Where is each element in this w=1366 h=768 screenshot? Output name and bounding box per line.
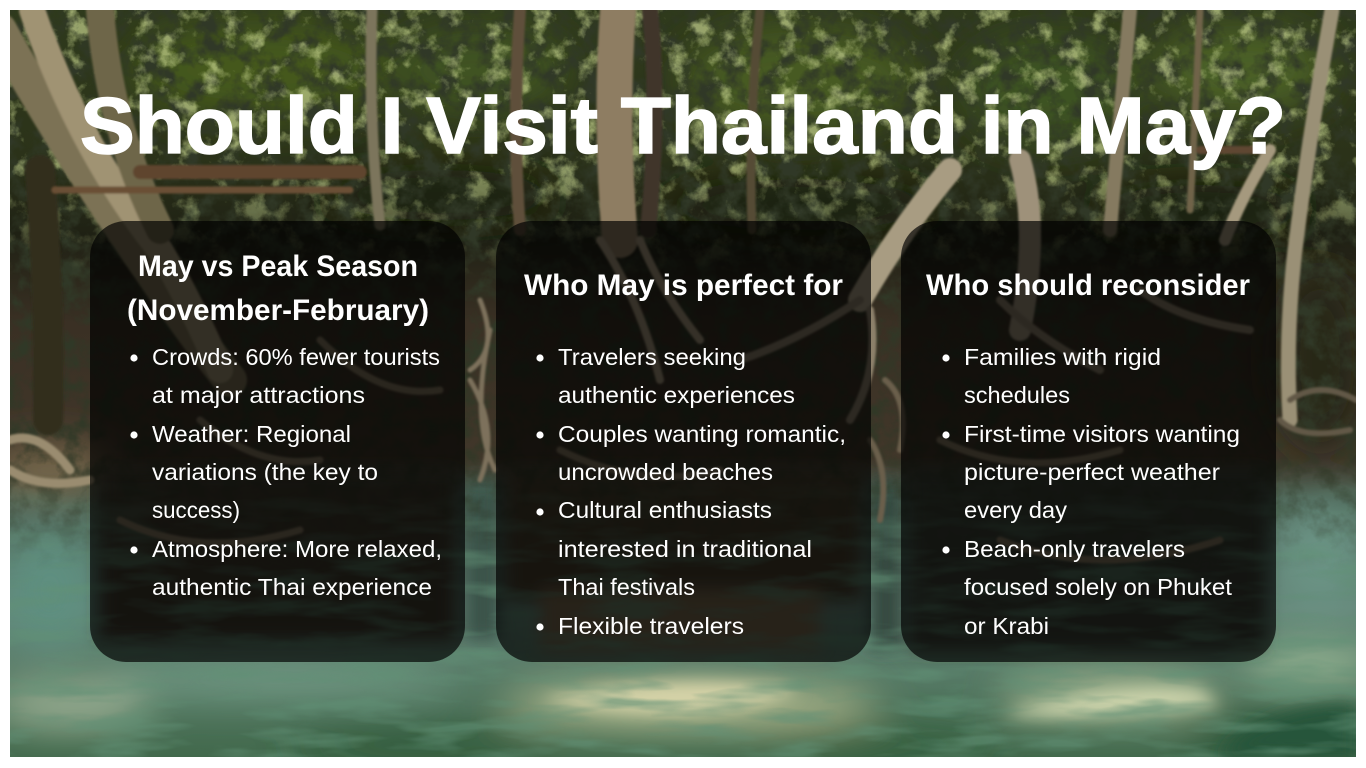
list: comparison points: variations (the key to [152,459,378,485]
list: travelers who should reconsider: Beach-only travelers [964,536,1185,562]
heading: Who should reconsider: Who should reconsider [926,269,1250,302]
dark root area under the panels [100,470,1356,757]
heading: May vs Peak Season: May vs Peak Season [138,250,418,283]
list: ideal travelers: interested in traditional [558,536,812,562]
title: Should I Visit Thailand in May? [80,81,1286,170]
list: travelers who should reconsider: First-time visitors wanting [964,421,1240,447]
list: ideal travelers: Couples wanting romantic, [558,421,846,447]
panel: May vs Peak Season [90,221,465,662]
list: comparison points: success) [152,497,240,523]
heading: May vs Peak Season [127,250,429,327]
list: comparison points: Crowds: 60% fewer tourists [152,344,440,370]
list: comparison points [130,344,442,600]
list: travelers who should reconsider: or Krabi [964,613,1049,639]
list: ideal travelers: authentic experiences [558,382,795,408]
list: travelers who should reconsider: Families with rigid [964,344,1161,370]
heading: Who May is perfect for: Who May is perfect for [524,269,843,302]
list: ideal travelers: Cultural enthusiasts [558,497,772,523]
list: travelers who should reconsider: schedules [964,382,1070,408]
list: comparison points: at major attractions [152,382,365,408]
panel: Who should reconsider [901,221,1276,662]
list: comparison points: Atmosphere: More relaxed, [152,536,442,562]
list: travelers who should reconsider: every day [964,497,1068,523]
list: ideal travelers: uncrowded beaches [558,459,773,485]
list: ideal travelers: Flexible travelers [558,613,744,639]
list: ideal travelers: Thai festivals [558,574,695,600]
list: ideal travelers [536,344,846,639]
list: comparison points: authentic Thai experience [152,574,432,600]
list: travelers who should reconsider: focused solely on Phuket [964,574,1233,600]
panel: Who May is perfect for [496,221,871,662]
list: ideal travelers: Travelers seeking [558,344,746,370]
heading: May vs Peak Season: (November-February) [127,294,429,327]
list: travelers who should reconsider: picture-perfect weather [964,459,1220,485]
list: comparison points: Weather: Regional [152,421,351,447]
list: travelers who should reconsider [942,344,1240,639]
